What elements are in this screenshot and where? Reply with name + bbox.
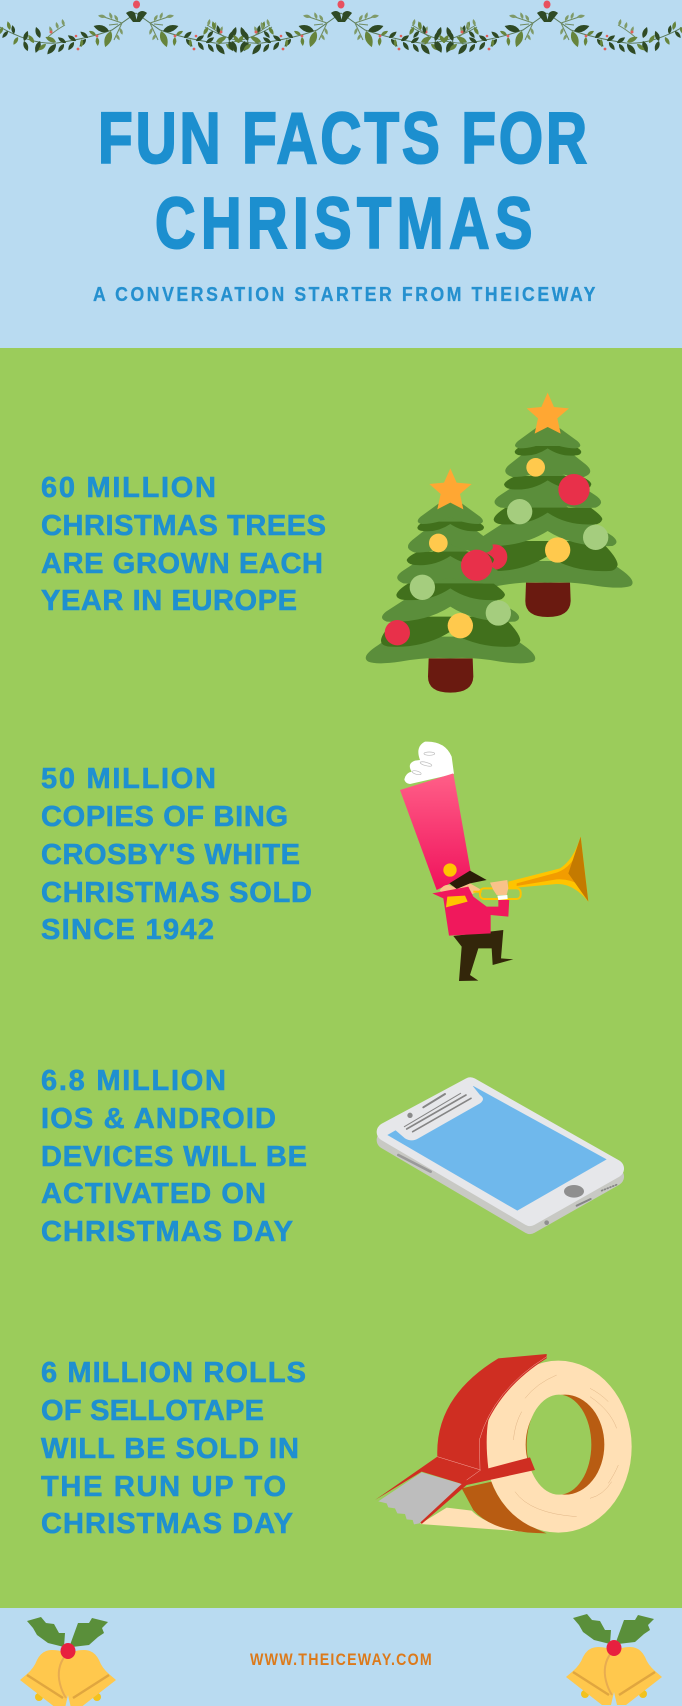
fact text: device activations: IOS & ANDROID — [41, 1103, 276, 1135]
fact text: device activations — [41, 1065, 307, 1248]
fact text: sellotape: OF SELLOTAPE — [41, 1395, 264, 1427]
icon: sellotape dispenser — [375, 1354, 632, 1533]
fact text: christmas trees: CHRISTMAS TREES — [41, 510, 326, 542]
title: CHRISTMAS — [155, 183, 538, 264]
title: FUN FACTS FOR — [98, 98, 590, 179]
fact text: white christmas: CHRISTMAS SOLD — [41, 877, 312, 909]
fact text: device activations: DEVICES WILL BE — [41, 1141, 307, 1173]
panel: footer background — [0, 1608, 682, 1706]
icon: christmas trees — [366, 393, 633, 693]
fact text: white christmas: COPIES OF BING — [41, 801, 288, 833]
fact text: white christmas: CROSBY'S WHITE — [41, 839, 300, 871]
fact text: christmas trees: 60 MILLION — [41, 472, 216, 504]
icon: toy soldier trumpeter — [400, 742, 588, 981]
fact text: sellotape: 6 MILLION ROLLS — [41, 1357, 306, 1389]
subtitle: A CONVERSATION STARTER FROM THEICEWAY — [93, 283, 598, 306]
fact text: sellotape: WILL BE SOLD IN — [41, 1433, 299, 1465]
footer website: WWW.THEICEWAY.COM — [250, 1650, 433, 1669]
garland — [0, 0, 682, 56]
fact text: white christmas — [41, 763, 312, 946]
title — [98, 98, 590, 264]
fact text: christmas trees: ARE GROWN EACH — [41, 548, 323, 580]
icon: smartphone — [386, 1083, 618, 1225]
panel: header background — [0, 0, 682, 348]
panel: green facts background — [0, 348, 682, 1608]
icon: left bells with holly — [20, 1617, 116, 1706]
fact text: device activations: ACTIVATED ON — [41, 1178, 266, 1210]
fact text: white christmas: 50 MILLION — [41, 763, 216, 795]
fact text: device activations: CHRISTMAS DAY — [41, 1216, 293, 1248]
fact text: white christmas: SINCE 1942 — [41, 914, 214, 946]
icon: right bells with holly — [566, 1614, 662, 1705]
fact text: device activations: 6.8 MILLION — [41, 1065, 226, 1097]
fact text: christmas trees: YEAR IN EUROPE — [41, 585, 297, 617]
fact text: sellotape: CHRISTMAS DAY — [41, 1508, 293, 1540]
fact text: sellotape: THE RUN UP TO — [41, 1471, 286, 1503]
fact text: christmas trees — [41, 472, 326, 617]
fact text: sellotape — [41, 1357, 306, 1540]
